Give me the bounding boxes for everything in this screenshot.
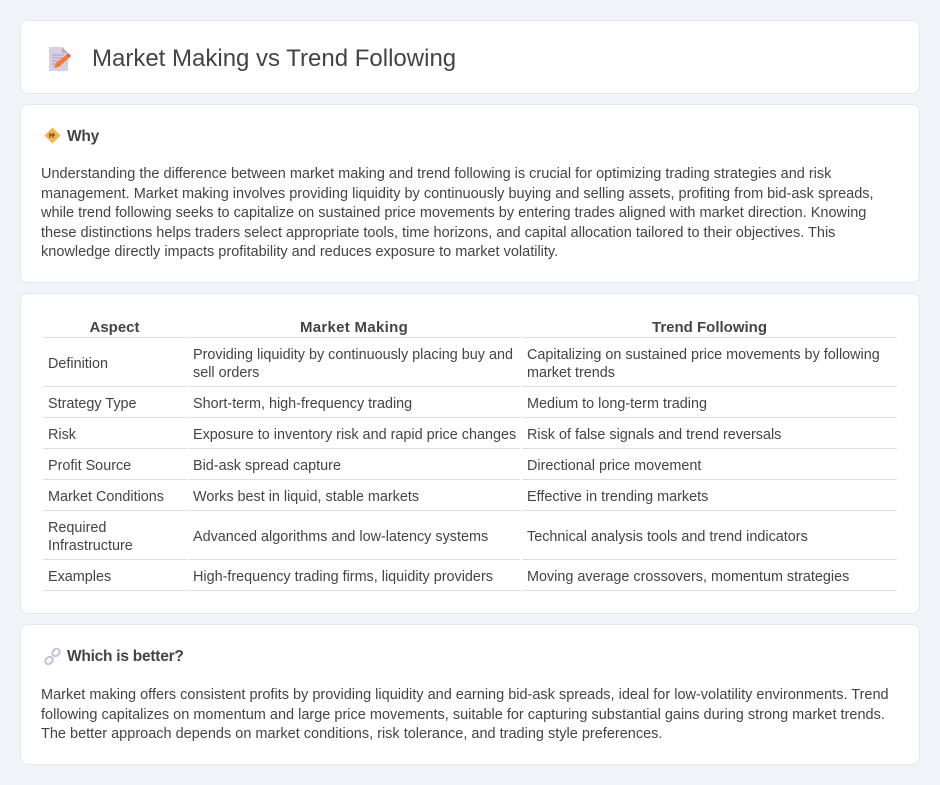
heading: why: Why [67,128,99,145]
icon: document with pencil [49,47,71,71]
text block: why: while trend following seeks to capitalize on sustained price movements by entering trades aligned with market direction. Knowing [41,205,866,221]
comparison table: Risk [48,427,76,443]
comparison table: Medium to long-term trading [527,396,707,412]
text block: which is better [41,687,889,742]
text block: why [41,166,874,260]
comparison table: Technical analysis tools and trend indicators [527,529,808,545]
text block: which is better: Market making offers consistent profits by providing liquidity and earning bid-ask spreads, ideal for low-volatility environments. Trend [41,687,889,703]
comparison table [43,319,897,591]
comparison table: Strategy Type [48,396,137,412]
text block: why: management. Market making involves providing liquidity by continuously buying and selling assets, profiting from bid-ask spreads, [41,186,874,202]
comparison table: Exposure to inventory risk and rapid price changes [193,427,516,443]
comparison table: Definition [48,356,108,372]
comparison table: Bid-ask spread capture [193,458,341,474]
icon: warning diamond [44,128,60,144]
header panel [20,20,920,94]
text block: why: these distinctions helps traders select appropriate tools, time horizons, and capital allocation tailored to their objectives. This [41,225,835,241]
text block: why: knowledge directly impacts profitability and reduces exposure to market volatility. [41,244,558,260]
comparison table: Short-term, high-frequency trading [193,396,412,412]
comparison table: High-frequency trading firms, liquidity providers [193,569,493,585]
comparison table: Effective in trending markets [527,489,708,505]
comparison table: Examples [48,569,111,585]
comparison table: Risk of false signals and trend reversals [527,427,781,443]
title: Market Making vs Trend Following [92,45,456,72]
comparison table: Trend Following [652,319,767,336]
comparison table: Directional price movement [527,458,701,474]
panel: which is better [20,624,920,765]
comparison table: Profit Source [48,458,131,474]
comparison table: Advanced algorithms and low-latency systems [193,529,488,545]
heading: which is better: Which is better? [67,648,184,665]
text block: why: Understanding the difference between market making and trend following is crucial for optimizing trading strategies and risk [41,166,831,182]
comparison table: Required Infrastructure [48,520,133,554]
comparison table: Providing liquidity by continuously placing buy and sell orders [193,347,513,381]
comparison table: Moving average crossovers, momentum strategies [527,569,849,585]
comparison table: Capitalizing on sustained price movements by following market trends [527,347,880,381]
comparison table: Market Making [300,319,408,336]
comparison table: Market Conditions [48,489,164,505]
panel: why [20,104,920,283]
icon: chain link [44,648,61,665]
text block: which is better: The better approach depends on market conditions, risk tolerance, and trading style preferences. [41,726,662,742]
panel: comparison table [20,293,920,614]
text block: which is better: following capitalizes on momentum and large price movements, suitable for capturing substantial gains during strong market trends. [41,707,885,723]
comparison table: Aspect [89,319,140,336]
comparison table: Works best in liquid, stable markets [193,489,419,505]
